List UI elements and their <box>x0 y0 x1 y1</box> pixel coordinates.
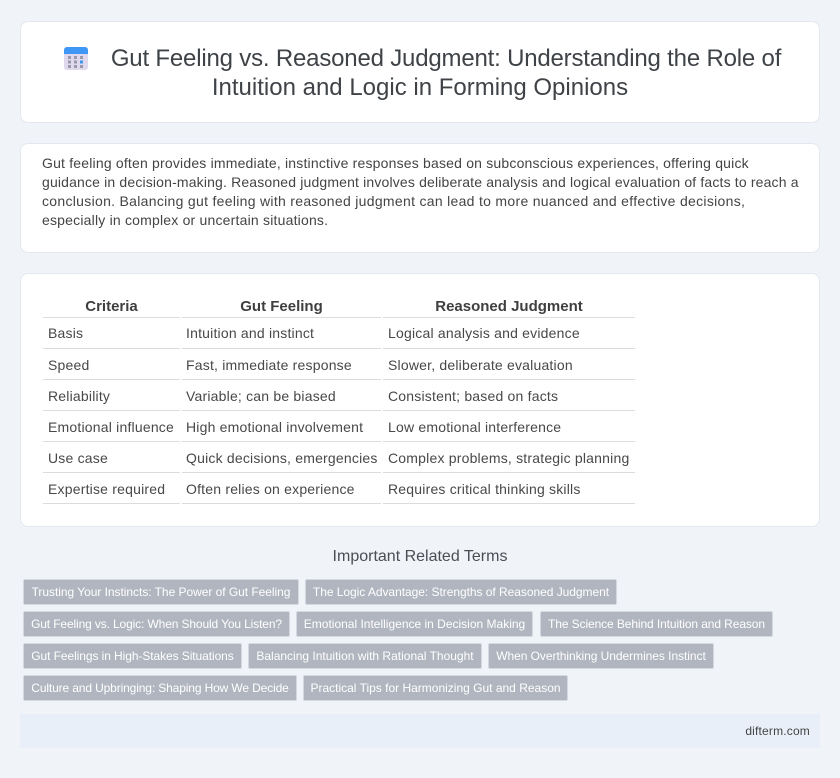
comparison table: Complex problems, strategic planning <box>388 450 629 466</box>
intro text: conclusion. Balancing gut feeling with reasoned judgment can lead to more nuanced and effective decisions, <box>42 193 745 209</box>
related terms tags: Practical Tips for Harmonizing Gut and Reason <box>310 681 561 695</box>
intro text: especially in complex or uncertain situations. <box>42 212 328 228</box>
comparison table: Reliability <box>48 388 110 404</box>
related terms tags: Culture and Upbringing: Shaping How We Decide <box>31 681 289 695</box>
related terms tags: The Logic Advantage: Strengths of Reasoned Judgment <box>313 585 609 599</box>
title <box>111 45 782 101</box>
comparison table: Low emotional interference <box>388 419 561 435</box>
icon: calendar <box>64 47 88 70</box>
footer bar <box>20 714 820 748</box>
related terms heading: Important Related Terms <box>333 548 507 565</box>
related terms tags: Gut Feeling vs. Logic: When Should You Listen? <box>31 617 282 631</box>
comparison table <box>43 298 635 504</box>
comparison table: Often relies on experience <box>186 481 355 497</box>
comparison table: Criteria <box>85 298 138 315</box>
title: Gut Feeling vs. Reasoned Judgment: Understanding the Role of <box>111 45 781 72</box>
intro text <box>42 155 799 228</box>
comparison table panel <box>20 273 820 527</box>
comparison table: Logical analysis and evidence <box>388 325 580 341</box>
comparison table: Variable; can be biased <box>186 388 336 404</box>
comparison table: Slower, deliberate evaluation <box>388 357 573 373</box>
title: Intuition and Logic in Forming Opinions <box>212 74 628 101</box>
related terms tags: Gut Feelings in High-Stakes Situations <box>31 649 234 663</box>
intro panel <box>20 143 820 253</box>
comparison table: Reasoned Judgment <box>435 298 583 315</box>
intro text: Gut feeling often provides immediate, instinctive responses based on subconscious experiences, offering quick <box>42 155 749 171</box>
comparison table: Emotional influence <box>48 419 174 435</box>
comparison table: Basis <box>48 325 83 341</box>
comparison table: Gut Feeling <box>240 298 323 315</box>
comparison table: Use case <box>48 450 108 466</box>
header panel <box>20 21 820 123</box>
comparison table: Fast, immediate response <box>186 357 352 373</box>
footer brand: difterm.com <box>745 724 810 738</box>
related terms tags: Trusting Your Instincts: The Power of Gut Feeling <box>32 585 290 599</box>
comparison table: Requires critical thinking skills <box>388 481 581 497</box>
related terms tags: The Science Behind Intuition and Reason <box>548 617 765 631</box>
related terms tags: Emotional Intelligence in Decision Making <box>304 617 525 631</box>
comparison table: Consistent; based on facts <box>388 388 558 404</box>
related terms tags <box>23 579 773 701</box>
intro text: guidance in decision-making. Reasoned judgment involves deliberate analysis and logical evaluation of facts to reach a <box>42 174 799 190</box>
comparison table: Intuition and instinct <box>186 325 314 341</box>
comparison table: Quick decisions, emergencies <box>186 450 378 466</box>
comparison table: Expertise required <box>48 481 165 497</box>
related terms tags: Balancing Intuition with Rational Thought <box>256 649 474 663</box>
related terms tags: When Overthinking Undermines Instinct <box>496 649 706 663</box>
comparison table: Speed <box>48 357 89 373</box>
comparison table: High emotional involvement <box>186 419 363 435</box>
